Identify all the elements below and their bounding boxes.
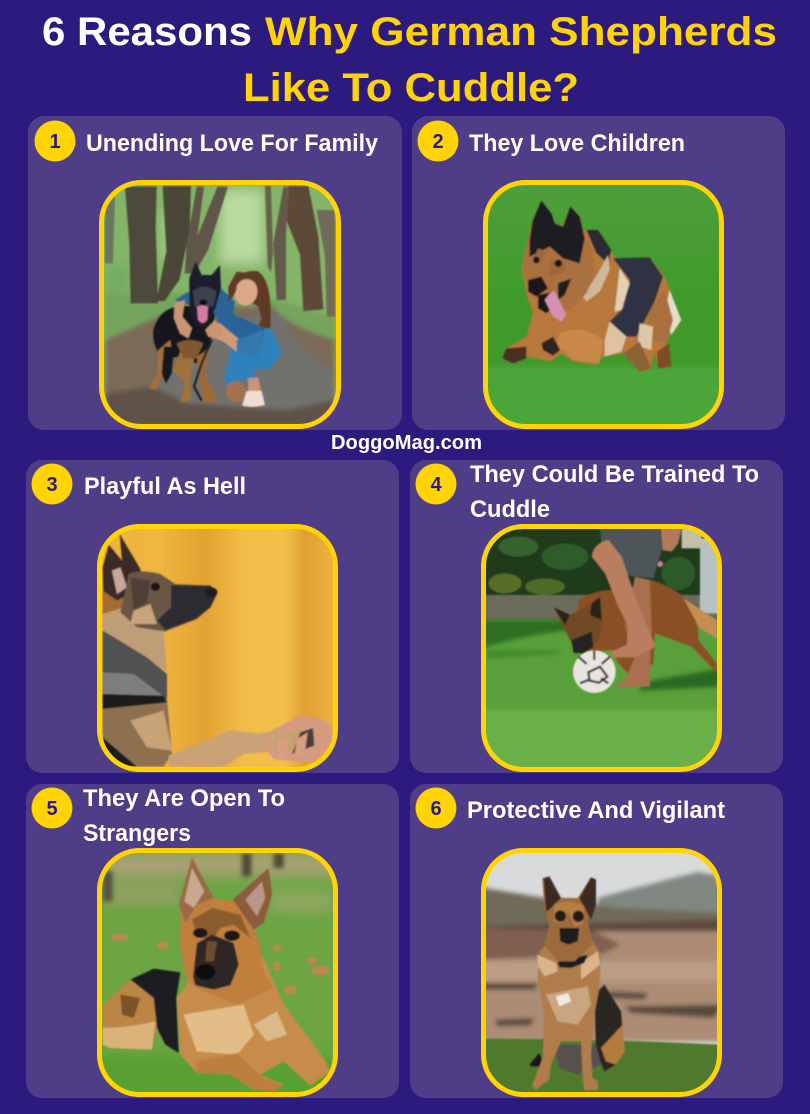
chest and forelegs	[177, 958, 330, 1091]
photo: dog lying on grass	[97, 848, 338, 1098]
panel: 3 playful as hell	[26, 460, 399, 774]
heading 6: Protective And Vigilant	[467, 797, 725, 824]
leg	[169, 728, 304, 767]
hand	[264, 716, 332, 762]
title: 6 Reasons	[42, 10, 252, 54]
football	[573, 650, 616, 693]
girl: denim jacket	[175, 288, 265, 342]
photo: woman hugging dog in forest	[97, 177, 340, 430]
dog	[153, 306, 215, 363]
number badge 3: 3	[46, 474, 58, 496]
number badge 1	[34, 120, 76, 162]
hind quarter	[103, 980, 158, 1050]
number badge 3	[32, 464, 72, 504]
panel: 5 they are open to strangers	[26, 784, 399, 1098]
site credit: DoggoMag.com	[331, 432, 482, 454]
number badge 5	[32, 788, 72, 828]
head	[120, 571, 218, 631]
man	[600, 528, 662, 578]
rear and tail	[529, 1053, 544, 1066]
heading 1: Unending Love For Family	[86, 130, 379, 157]
title: Like To Cuddle?	[243, 66, 579, 110]
photo: dog with football and man	[478, 522, 722, 772]
dog	[573, 580, 717, 677]
heading 4: Cuddle	[470, 496, 550, 523]
panel: 6 protective and vigilant	[410, 784, 783, 1098]
photo: dog offering paw	[97, 524, 338, 774]
head	[180, 898, 274, 1005]
head	[522, 201, 595, 310]
number badge 1: 1	[49, 131, 61, 153]
lower body	[103, 699, 172, 767]
number badge 2	[418, 120, 458, 162]
neck and chest	[103, 607, 167, 671]
girl: jeans	[224, 328, 282, 387]
heading 3: Playful As Hell	[84, 473, 246, 500]
number badge 6: 6	[430, 798, 442, 820]
title	[42, 10, 777, 110]
body	[532, 938, 601, 1091]
panel: 4 they could be trained to cuddle	[410, 460, 783, 773]
dog body	[502, 230, 680, 372]
panel: 1 unending love for family	[28, 116, 402, 430]
girl: hair	[236, 270, 272, 329]
heading 2: They Love Children	[469, 130, 685, 157]
number badge 2: 2	[432, 131, 444, 153]
mane	[103, 631, 167, 699]
heading 4: They Could Be Trained To	[470, 461, 759, 488]
panel: 2 they love children	[412, 116, 785, 430]
number badge 4	[416, 464, 456, 504]
title: Why German Shepherds	[265, 10, 777, 54]
heading 4	[470, 461, 759, 523]
heading 5	[83, 785, 285, 847]
heading 5: They Are Open To	[83, 785, 285, 812]
photo: dog running on grass	[483, 180, 724, 430]
number badge 5: 5	[46, 798, 58, 820]
black saddle	[130, 969, 180, 1053]
number badge 6	[416, 788, 456, 828]
head	[542, 876, 596, 961]
number badge 4: 4	[430, 474, 442, 496]
photo: dog sitting on hillside	[481, 848, 722, 1098]
heading 5: Strangers	[83, 820, 191, 847]
